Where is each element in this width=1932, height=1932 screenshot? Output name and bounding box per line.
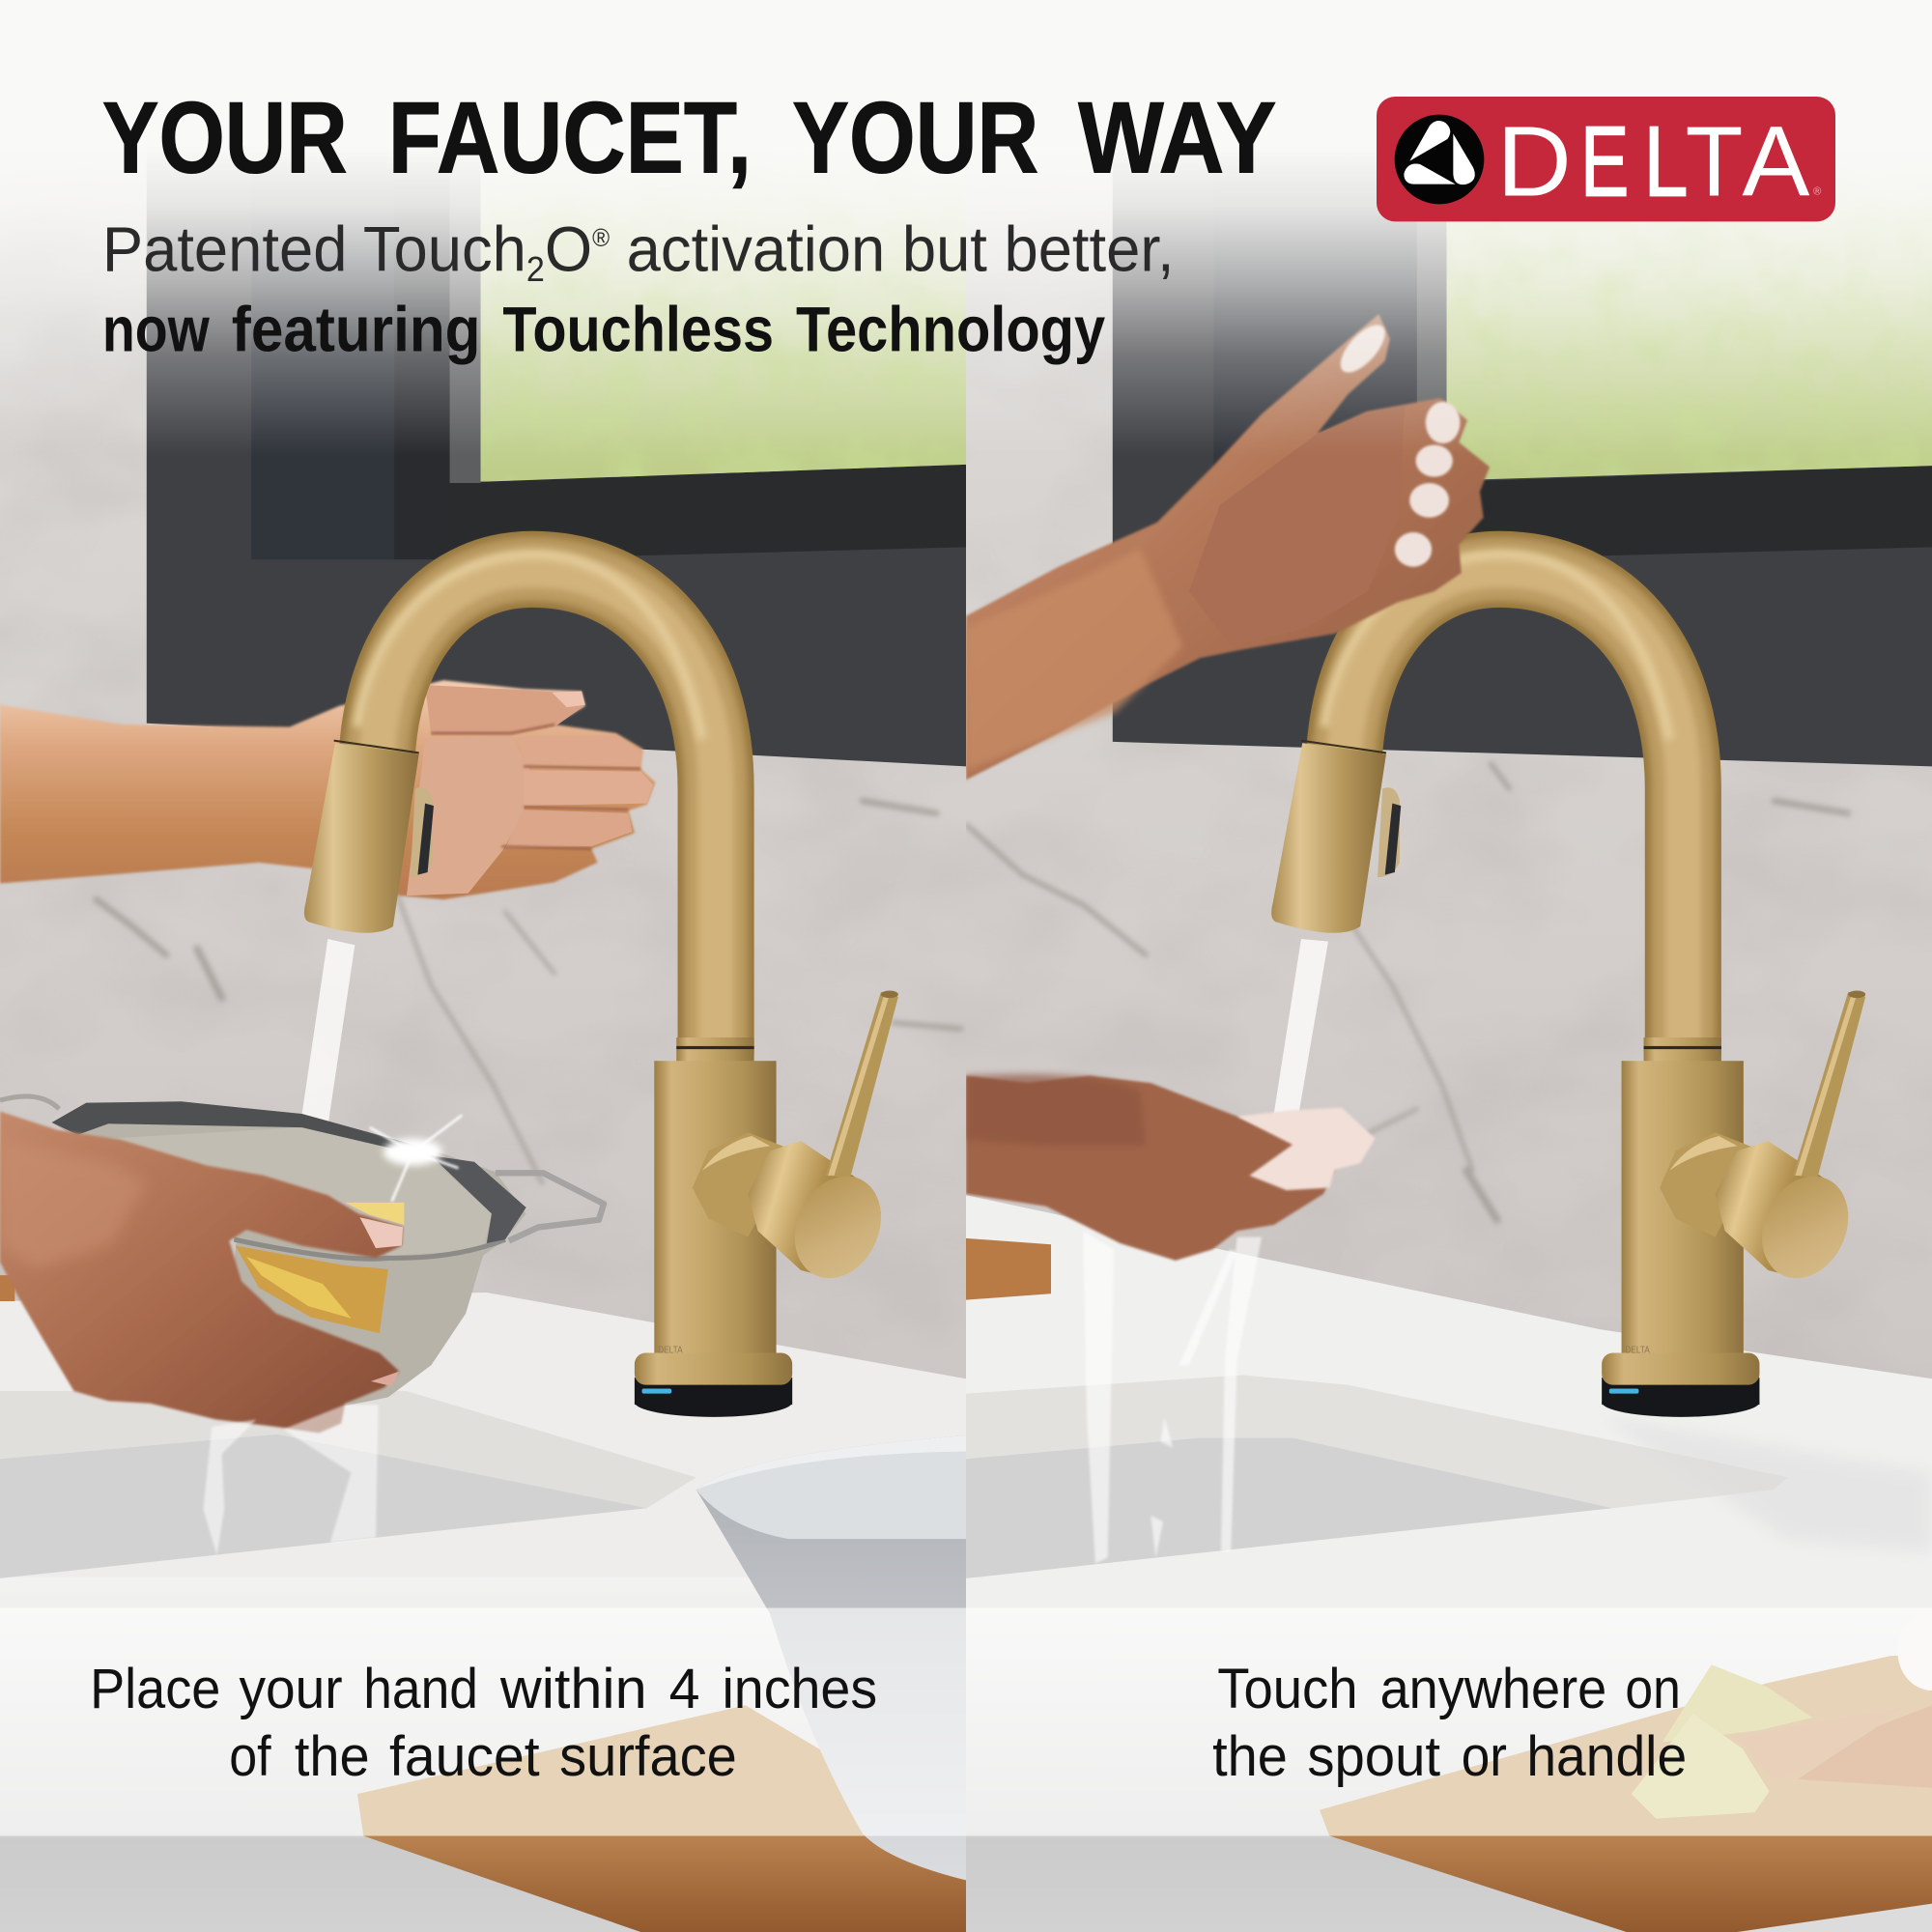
faucet	[304, 554, 898, 1417]
title: YOUR	[102, 82, 348, 195]
faucet	[1271, 554, 1865, 1417]
subtitle line one: Patented Touch	[102, 214, 547, 286]
subtitle line two: featuring	[232, 295, 480, 366]
logo wordmark: E	[1580, 106, 1629, 217]
caption: left	[90, 1658, 877, 1788]
caption: left: faucet	[389, 1725, 540, 1788]
countertop and sink	[966, 1195, 1932, 1932]
caption: left: inches	[722, 1658, 877, 1720]
marble wall	[0, 229, 966, 1379]
logo: Delta	[1377, 97, 1835, 221]
caption: left: surface	[559, 1725, 737, 1788]
caption: left: Place	[90, 1658, 220, 1720]
caption: right: or	[1462, 1725, 1507, 1788]
caption: left: hand	[363, 1658, 478, 1720]
subtitle line two: Technology	[796, 295, 1105, 366]
upper hand touching spout	[966, 314, 1490, 780]
caption: left: the	[295, 1725, 370, 1788]
caption: right: anywhere	[1380, 1658, 1606, 1720]
caption band	[0, 1608, 1932, 1836]
logo wordmark	[1497, 106, 1810, 217]
caption: right: the	[1212, 1725, 1288, 1788]
title: FAUCET,	[388, 82, 752, 195]
logo wordmark: D	[1497, 106, 1572, 217]
marble wall	[966, 229, 1932, 1379]
top white fade	[0, 0, 1932, 456]
window frame	[1113, 176, 1932, 767]
logo wordmark: L	[1644, 106, 1688, 216]
subtitle line two: now	[102, 295, 210, 366]
lower soapy hand	[966, 1074, 1375, 1261]
splashing water	[203, 1405, 379, 1555]
title: WAY	[1078, 82, 1276, 195]
hand holding strainer	[0, 1112, 403, 1433]
subtitle line one: 2	[526, 250, 545, 289]
caption: left: of	[229, 1725, 271, 1788]
subtitle line two	[102, 295, 1105, 366]
strainer	[0, 1096, 604, 1406]
title	[102, 82, 1276, 195]
title: YOUR	[792, 82, 1038, 195]
water stream	[1271, 939, 1328, 1128]
window frame	[147, 174, 966, 767]
cutting board	[357, 1705, 966, 1932]
caption: left: 4	[669, 1658, 699, 1720]
logo wordmark: A	[1742, 106, 1810, 217]
panel: right scene	[966, 0, 1932, 1932]
falling water	[1083, 1231, 1262, 1564]
caption: right: handle	[1526, 1725, 1687, 1788]
logo wordmark: T	[1686, 106, 1743, 217]
subtitle line one: activation but better,	[610, 214, 1175, 286]
foreground bowl	[696, 1435, 966, 1880]
caption: right: spout	[1307, 1725, 1440, 1788]
caption: right	[1212, 1658, 1687, 1788]
subtitle line two: Touchless	[502, 295, 774, 366]
subtitle line one: ®	[592, 225, 610, 252]
subtitle line one: O	[545, 214, 592, 286]
cutting board and apple pieces	[1320, 1611, 1932, 1932]
caption: right: on	[1625, 1658, 1681, 1720]
panel: left scene	[0, 0, 966, 1932]
window view of trees	[1447, 176, 1932, 479]
registered mark: ®	[1813, 186, 1822, 198]
water stream	[301, 939, 355, 1121]
countertop and sink	[0, 1275, 966, 1932]
upper hand by faucet	[0, 680, 656, 899]
caption: left: within	[499, 1658, 647, 1720]
caption: right: Touch	[1217, 1658, 1358, 1720]
window view of trees	[481, 176, 966, 482]
caption: left: your	[239, 1658, 343, 1720]
logo emblem	[1395, 115, 1484, 204]
logo badge	[1377, 97, 1835, 221]
